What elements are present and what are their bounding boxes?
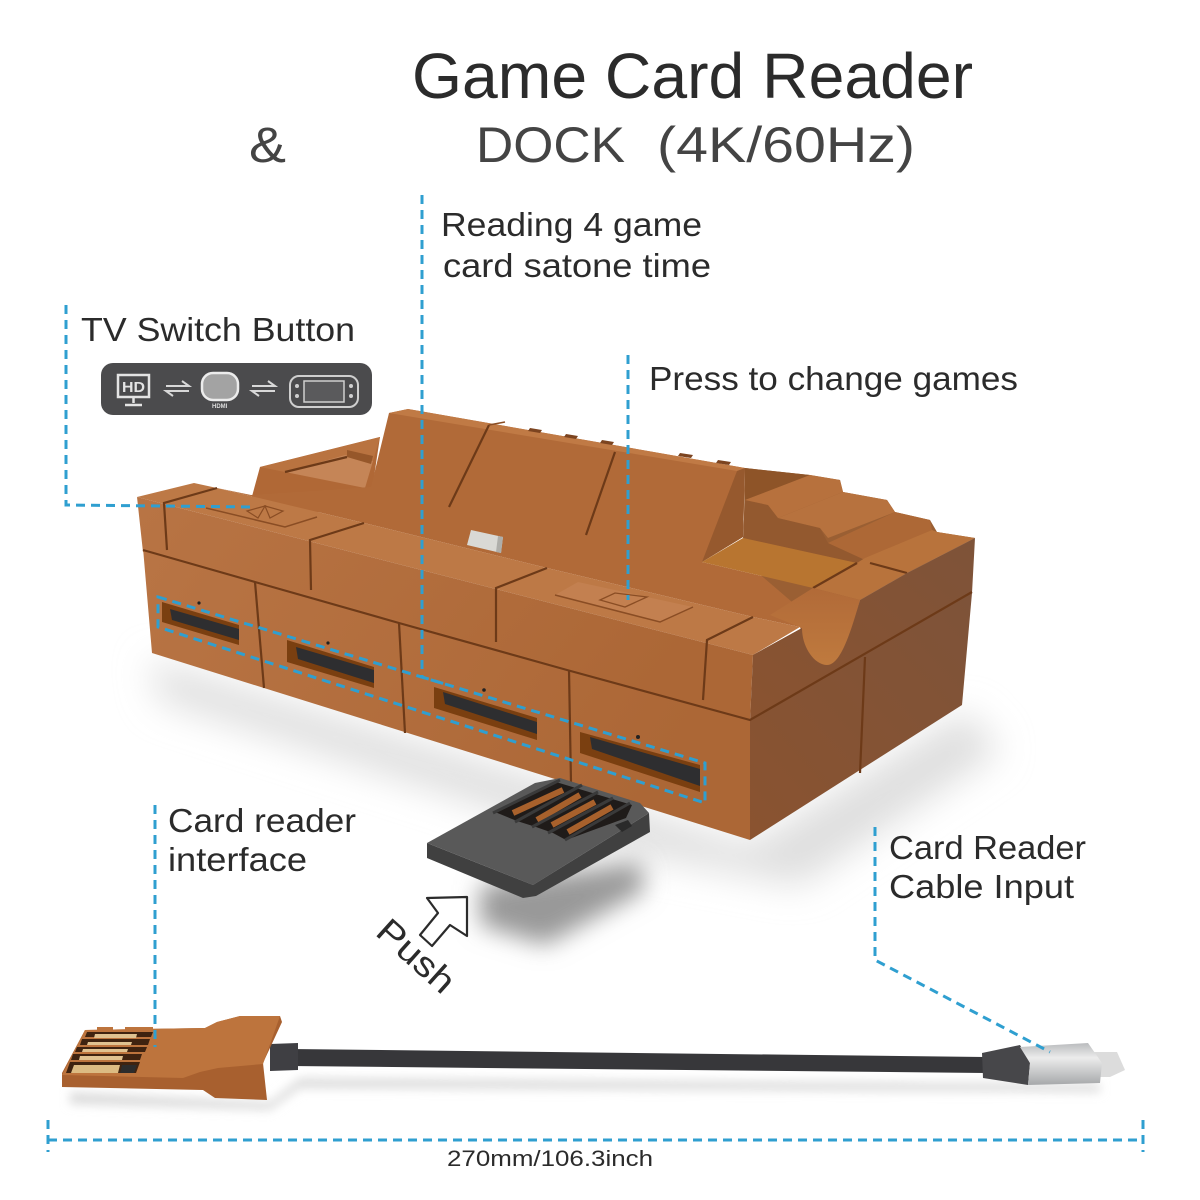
card slots xyxy=(162,601,700,792)
icon: arrows left xyxy=(166,381,189,396)
dock rear right steps xyxy=(702,468,975,620)
push arrow xyxy=(420,897,467,946)
cable shadow xyxy=(70,1078,1100,1110)
cable plug xyxy=(62,1016,282,1100)
text: card reader interface xyxy=(168,802,356,878)
text: card reader cable input: Card Reader xyxy=(889,829,1086,866)
cable cord xyxy=(290,1049,985,1073)
text: card reader interface: interface xyxy=(168,841,307,878)
icon: HDMI button: HDMI xyxy=(212,404,228,410)
leader: card reader interface xyxy=(154,805,156,1047)
dock product xyxy=(137,409,975,840)
card contacts xyxy=(493,780,632,840)
leader: press to change games xyxy=(626,355,630,600)
leader: reading 4 game cards xyxy=(422,195,445,684)
push label: Push xyxy=(369,911,463,1002)
dock upper front block xyxy=(137,483,975,722)
dock lower front body xyxy=(143,548,972,840)
text: reading 4 game cards: Reading 4 game xyxy=(441,206,702,243)
dock raised centre block xyxy=(217,409,858,664)
text: reading 4 game cards xyxy=(441,206,711,284)
dock back-left step xyxy=(251,437,380,520)
text: press to change games: Press to change games xyxy=(649,360,1018,397)
card reader cable xyxy=(62,1016,1125,1100)
icon: HD monitor: HD xyxy=(122,379,145,396)
usb-c strain relief xyxy=(982,1045,1030,1085)
leader: slot outline xyxy=(158,597,705,803)
text: TV switch button: TV Switch Button xyxy=(81,311,355,348)
dock USB-C plug xyxy=(467,530,503,553)
game switch button on dock xyxy=(555,582,693,622)
icon: HDMI button xyxy=(202,373,238,410)
dimension label: 270mm/106.3inch xyxy=(447,1146,653,1171)
dimension line xyxy=(48,1120,1143,1152)
leader: TV switch button xyxy=(66,305,255,507)
text: card reader cable input xyxy=(889,829,1086,905)
leader: cable input xyxy=(875,827,1050,1052)
usb-c tip xyxy=(1093,1052,1125,1077)
title xyxy=(249,40,973,173)
card shadow xyxy=(480,862,645,945)
icon: handheld console xyxy=(290,376,358,407)
icon: HD monitor xyxy=(118,375,149,405)
game card xyxy=(427,778,650,898)
icon: arrows right xyxy=(252,381,275,396)
ground shadow under dock xyxy=(150,660,1000,885)
TV mode badge xyxy=(101,363,372,415)
title: (4K/60Hz) xyxy=(657,117,915,173)
text: card reader interface: Card reader xyxy=(168,802,356,839)
usb-c silver shell xyxy=(1020,1043,1102,1085)
cable strain relief left xyxy=(270,1043,298,1071)
title: DOCK xyxy=(476,117,625,173)
title: Game Card Reader xyxy=(412,40,973,112)
title: & xyxy=(249,117,286,173)
TV switch button on dock xyxy=(206,506,317,527)
text: card reader cable input: Cable Input xyxy=(889,868,1074,905)
text: reading 4 game cards: card satone time xyxy=(443,247,711,284)
